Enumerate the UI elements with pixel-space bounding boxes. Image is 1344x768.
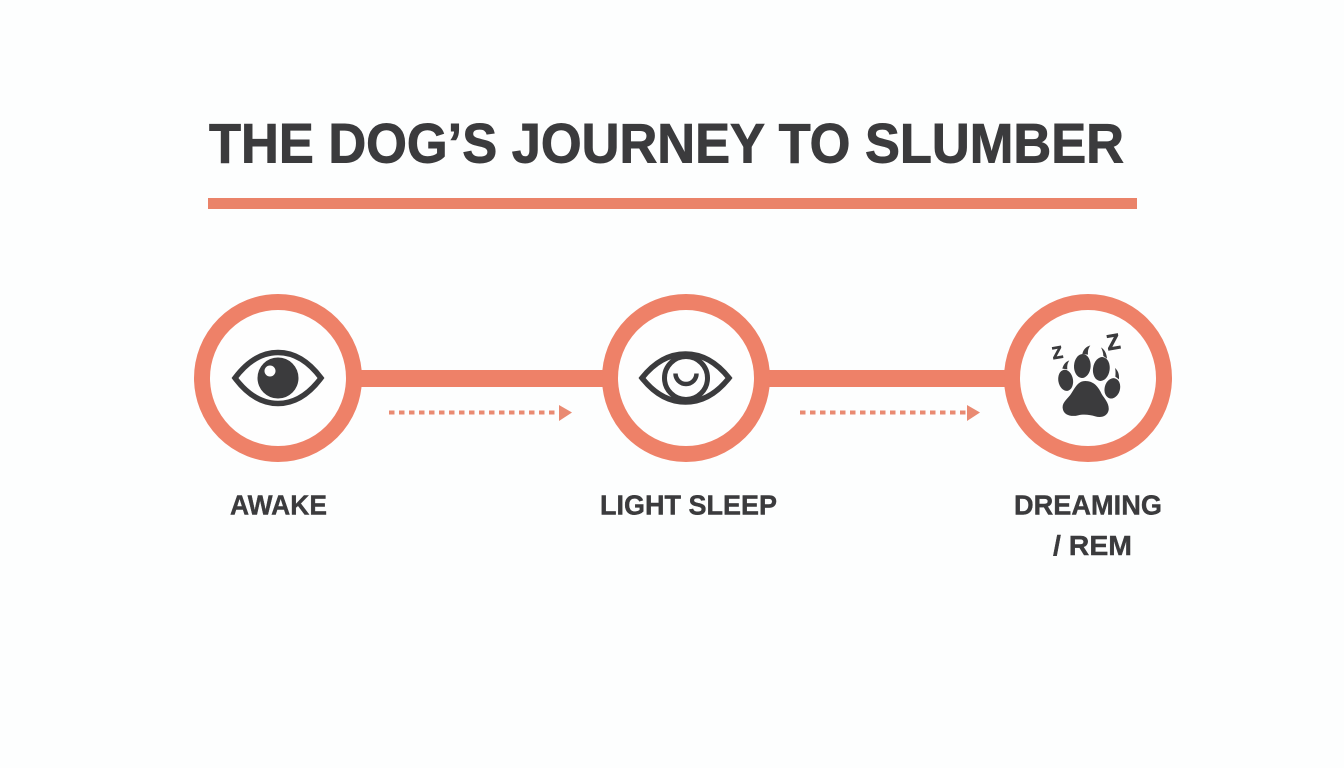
arrow: light sleep to dreaming	[800, 405, 980, 421]
stage: awake	[202, 302, 354, 520]
icon: half-closed eye	[642, 354, 729, 402]
label: light sleep: LIGHT SLEEP	[600, 490, 777, 520]
title underline	[208, 198, 1137, 209]
icon: sleeping paw	[1050, 329, 1122, 417]
ring: dreaming	[1012, 302, 1164, 454]
icon: small Z: Z	[1050, 342, 1065, 363]
title: THE DOG’S JOURNEY TO SLUMBER	[209, 112, 1124, 174]
label: dreaming / REM: / REM	[1053, 530, 1132, 561]
icon: open eye	[235, 352, 321, 404]
ring: light sleep	[610, 302, 762, 454]
connector: awake to light sleep	[355, 370, 610, 387]
arrow: awake to light sleep	[389, 405, 572, 421]
label: dreaming / REM: DREAMING	[1014, 490, 1162, 520]
stage: light sleep	[600, 302, 777, 520]
ring: awake	[202, 302, 354, 454]
connector: light sleep to dreaming	[762, 370, 1012, 387]
stage: dreaming / REM	[1012, 302, 1164, 561]
label: awake: AWAKE	[230, 490, 327, 520]
icon: large Z: Z	[1105, 329, 1122, 355]
label: dreaming / REM	[1014, 490, 1162, 561]
